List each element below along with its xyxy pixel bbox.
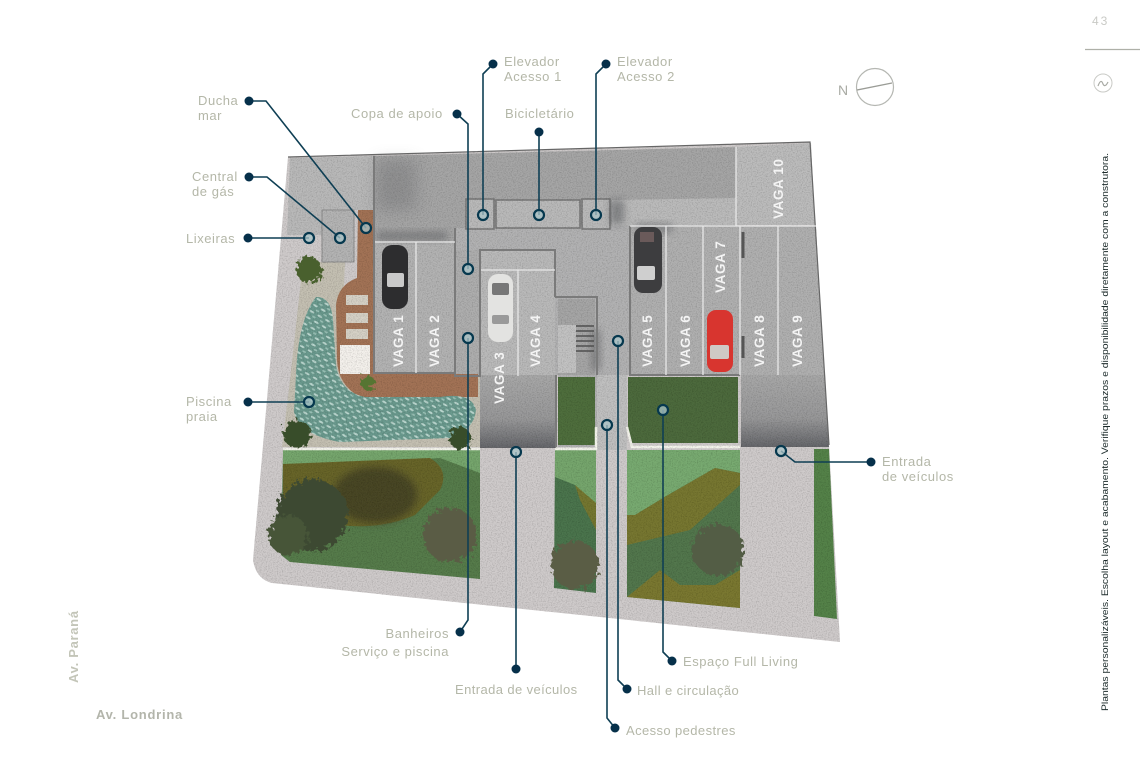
north compass: N <box>838 82 848 98</box>
cobble centre <box>480 375 556 448</box>
callout: Lixeiras <box>186 231 314 246</box>
vaga 10 zone <box>736 143 815 225</box>
street label: Av. Londrina: Av. Londrina <box>96 707 183 722</box>
car: red <box>707 310 733 372</box>
parking labels: VAGA 6 <box>678 315 693 367</box>
callout: Acesso pedestres: Acesso pedestres <box>626 723 736 738</box>
callout: Hall e circulação: Hall e circulação <box>637 683 739 698</box>
callout: Banheiros Serviço e piscina: Serviço e piscina <box>341 644 449 659</box>
pavement base <box>253 142 840 642</box>
callout: Hall e circulação <box>613 336 739 698</box>
loungers <box>346 295 368 339</box>
parking labels: VAGA 1 <box>391 315 406 367</box>
parking labels: VAGA 5 <box>640 315 655 367</box>
structure lines <box>374 156 740 447</box>
outline <box>288 142 829 445</box>
parking labels <box>391 159 805 404</box>
callout: Bicicletário <box>505 106 574 220</box>
callout: Piscina praia: Piscina <box>186 394 232 409</box>
driveway lower lane <box>612 198 736 226</box>
parking labels: VAGA 2 <box>427 315 442 367</box>
callout: Central de gás: de gás <box>192 184 234 199</box>
callout: Ducha mar <box>198 93 371 233</box>
parking labels: VAGA 9 <box>790 315 805 367</box>
callout: Entrada de veículos centre <box>455 447 578 697</box>
parking labels: VAGA 3 <box>492 352 507 404</box>
parking labels: VAGA 4 <box>528 315 543 367</box>
bike room and lifts <box>466 199 610 229</box>
service block <box>455 250 480 375</box>
top driveway <box>374 147 736 243</box>
callout: Elevador Acesso 1: Elevador <box>504 54 560 69</box>
cobble right <box>741 375 829 447</box>
gas enclosure <box>322 210 354 262</box>
pergola <box>340 345 370 374</box>
stair landing <box>558 325 576 373</box>
callout: Espaço Full Living: Espaço Full Living <box>683 654 798 669</box>
wood deck <box>336 210 478 397</box>
brand icon <box>1094 74 1112 92</box>
parking centre <box>481 251 555 376</box>
callout: Copa de apoio: Copa de apoio <box>351 106 443 121</box>
cobbled forecourt <box>287 156 374 235</box>
callout: Banheiros Serviço e piscina <box>341 333 473 659</box>
stair well <box>558 299 595 375</box>
car: black right <box>634 227 662 293</box>
callout: Elevador Acesso 2: Elevador <box>617 54 673 69</box>
shadows <box>376 160 672 370</box>
north compass <box>838 68 894 106</box>
car: black left <box>382 245 408 309</box>
page number: 43 <box>1092 14 1109 28</box>
callout: Ducha mar: mar <box>198 108 222 123</box>
lawn 2 <box>554 450 596 593</box>
callout: Ducha mar: Ducha <box>198 93 239 108</box>
callout: Banheiros Serviço e piscina: Banheiros <box>386 626 449 641</box>
callout: Entrada de veículos centre: Entrada de veículos <box>455 682 578 697</box>
callout: Espaço Full Living <box>658 405 798 669</box>
planter centre <box>558 377 595 445</box>
callout: Piscina praia <box>186 394 314 424</box>
street label: Av. Paraná: Av. Paraná <box>66 610 81 683</box>
callout: Piscina praia: praia <box>186 409 218 424</box>
pool garden <box>282 262 480 447</box>
lawn 3 <box>627 450 740 608</box>
disclaimer: Plantas personalizáveis. Escolha layout e acabamento. Verifique prazos e disponibilidade diretamente com a construtora. <box>1100 153 1111 711</box>
parking labels: VAGA 10 <box>771 159 786 219</box>
parking labels: VAGA 8 <box>752 315 767 367</box>
deck edge highlight <box>283 427 740 449</box>
callout: Elevador Acesso 2: Acesso 2 <box>617 69 675 84</box>
divider <box>1085 48 1140 50</box>
lawn 1 <box>281 450 480 579</box>
stair treads <box>576 326 594 351</box>
callout: Copa de apoio <box>351 106 473 274</box>
callout: Elevador Acesso 2 <box>591 54 675 220</box>
planter right <box>628 377 738 443</box>
callout: Entrada de veículos right: de veículos <box>882 469 954 484</box>
path <box>597 375 627 450</box>
callout: Lixeiras: Lixeiras <box>186 231 235 246</box>
parking right <box>630 226 824 375</box>
callout: Central de gás <box>192 169 345 243</box>
callout: Bicicletário: Bicicletário <box>505 106 574 121</box>
pool <box>294 297 476 442</box>
callout: Central de gás: Central <box>192 169 238 184</box>
dividers by parking <box>742 232 744 358</box>
lawn 4 <box>814 449 837 619</box>
callout: Acesso pedestres <box>602 420 736 738</box>
callout: Elevador Acesso 1 <box>478 54 562 220</box>
parking left <box>375 241 455 373</box>
callout: Entrada de veículos right: Entrada <box>882 454 932 469</box>
callout: Elevador Acesso 1: Acesso 1 <box>504 69 562 84</box>
site plan <box>253 142 840 642</box>
parking labels: VAGA 7 <box>713 241 728 293</box>
callout: Entrada de veículos right <box>776 446 954 484</box>
parking lines <box>375 147 816 376</box>
bushes and palms <box>268 257 744 589</box>
car: white <box>488 274 513 342</box>
central corridor <box>455 226 630 447</box>
